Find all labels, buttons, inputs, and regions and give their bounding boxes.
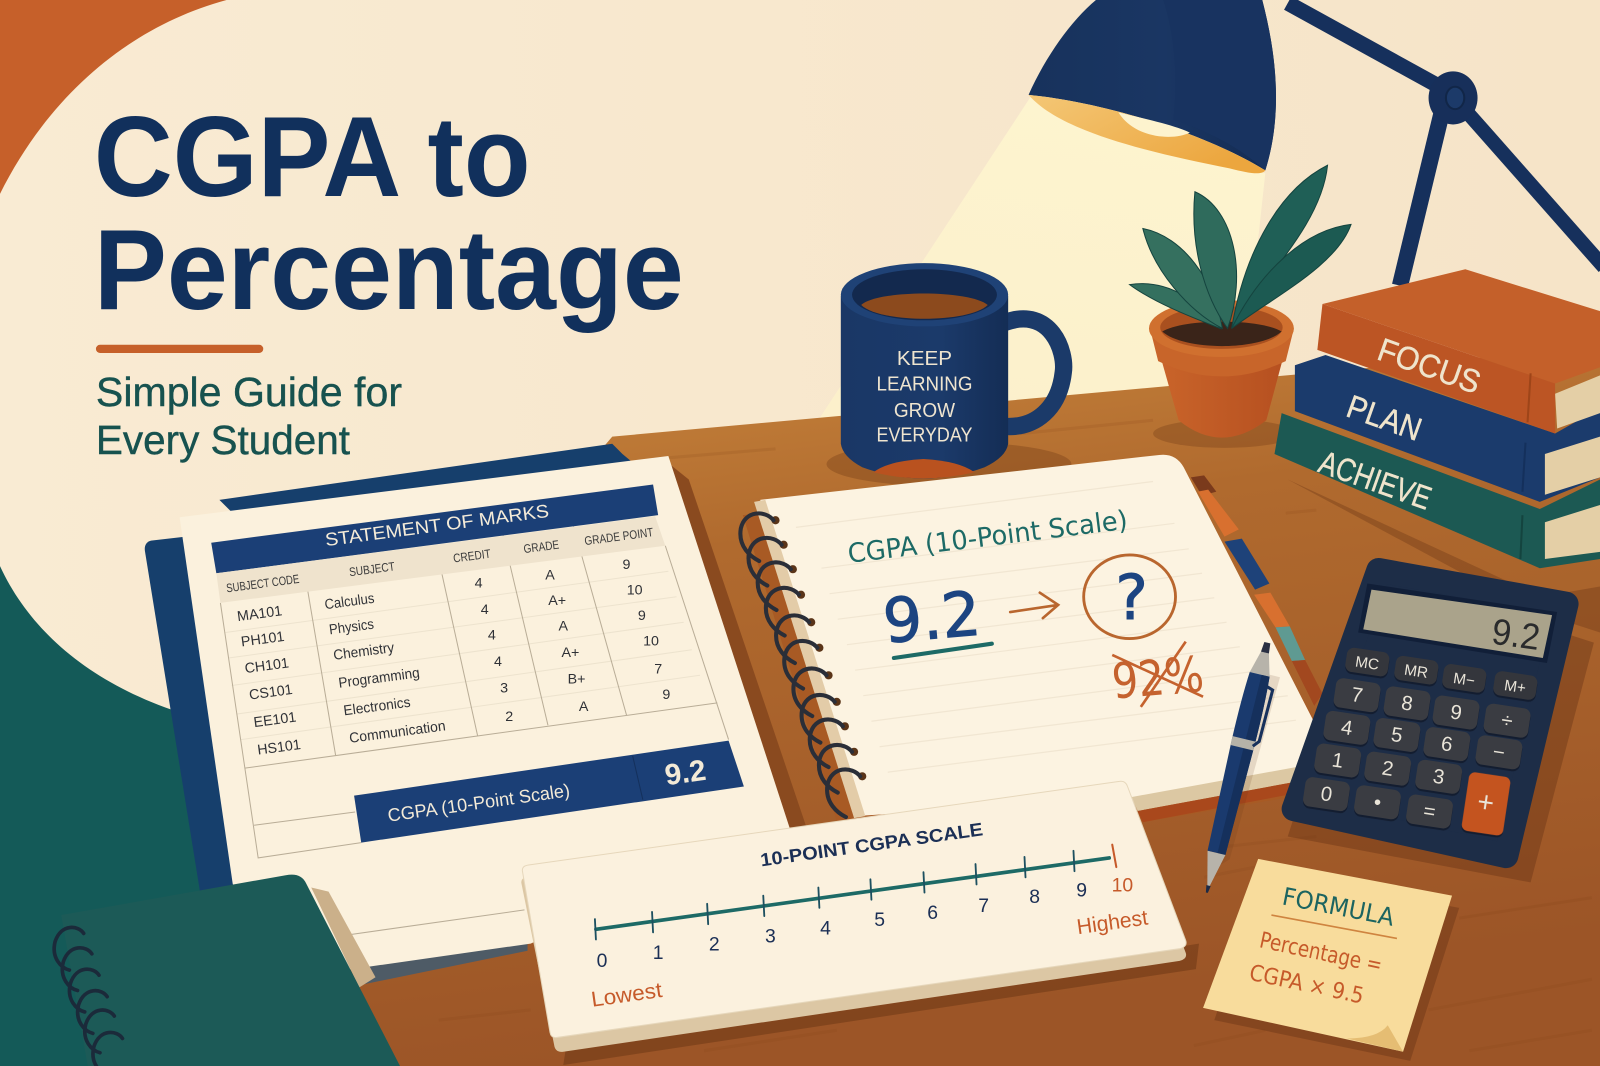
lowest label: Lowest: [590, 978, 664, 1012]
subject names: Programming: [338, 665, 421, 692]
subject codes: EE101: [253, 710, 297, 731]
book: achieve: [1274, 413, 1600, 568]
cgpa result bar: [354, 741, 744, 843]
card title: 10-POINT CGPA SCALE: [759, 818, 984, 870]
plus key: [1461, 772, 1511, 836]
title: [94, 94, 684, 334]
lamp: [1029, 0, 1600, 286]
subject names: Electronics: [343, 695, 411, 719]
grades: A: [579, 699, 589, 715]
mug handle: [1005, 319, 1064, 427]
book: focus: [1317, 269, 1600, 434]
grades: A: [545, 567, 555, 583]
book: plan: [1295, 355, 1600, 502]
subject codes: HS101: [256, 737, 302, 759]
memory keys: M−: [1452, 670, 1476, 690]
subject codes: [236, 603, 302, 759]
scale numbers: 5: [874, 909, 885, 931]
subject names: Communication: [348, 718, 447, 747]
memory keys: M+: [1503, 677, 1527, 697]
subject codes: MA101: [236, 603, 283, 625]
card edge: [521, 793, 1186, 1052]
number keys: 5: [1390, 724, 1404, 747]
subtitle: Simple Guide for: [96, 369, 402, 415]
cgpa result bar: 9.2: [663, 754, 708, 792]
credits: 4: [488, 628, 496, 644]
number line: [595, 845, 1116, 940]
notebook heading: CGPA (10-Point Scale): [846, 505, 1129, 570]
calculator screen: 9.2: [1489, 611, 1543, 658]
number keys: −: [1491, 741, 1506, 765]
stack of books: [1274, 269, 1600, 632]
subtitle: [96, 369, 402, 463]
title divider: [96, 345, 263, 353]
number keys: =: [1422, 800, 1437, 824]
credits: 3: [500, 681, 508, 697]
mug body: [841, 296, 1008, 478]
scale numbers: 8: [1029, 886, 1040, 908]
calculator: [1288, 570, 1594, 882]
column headers: SUBJECT: [348, 559, 396, 579]
number keys: 1: [1330, 749, 1345, 773]
scale numbers: 3: [765, 926, 776, 948]
green notebook rings: [54, 927, 122, 1066]
credits: [475, 576, 513, 725]
sticky note: [1203, 859, 1459, 1061]
card face: [522, 781, 1186, 1038]
number keys: 2: [1380, 758, 1395, 781]
number keys: [1302, 677, 1531, 829]
table header bar: [211, 485, 658, 573]
credits: 4: [494, 654, 502, 670]
number keys: 3: [1431, 766, 1446, 789]
number keys: 6: [1440, 733, 1454, 756]
notebook page: [760, 455, 1318, 816]
number keys: 9: [1449, 701, 1463, 725]
number keys: •: [1372, 792, 1383, 814]
column headers: GRADE: [523, 538, 560, 556]
calculator body: [1294, 570, 1566, 856]
notebook cover: [743, 464, 1322, 822]
column headers: GRADE POINT: [584, 525, 655, 548]
number keys: 4: [1340, 717, 1354, 740]
number keys: ÷: [1500, 710, 1514, 733]
subtitle: Every Student: [96, 417, 351, 463]
scale numbers: [597, 875, 1133, 972]
scale numbers: 6: [927, 902, 938, 924]
mug text: GROW: [894, 400, 956, 422]
handwritten 9.2: 9.2: [880, 579, 983, 658]
grades: A: [559, 618, 569, 634]
coffee mug: [827, 263, 1071, 487]
subject codes: PH101: [240, 629, 285, 650]
cgpa scale card: [521, 781, 1199, 1065]
credits: 2: [505, 709, 513, 725]
leaves: [1130, 165, 1351, 328]
lamp arm: [1288, 3, 1600, 286]
mug text: LEARNING: [877, 374, 972, 396]
grade points: 10: [627, 583, 643, 599]
table title: STATEMENT OF MARKS: [324, 500, 550, 550]
scale numbers: 7: [978, 895, 989, 917]
subject codes: CS101: [248, 682, 294, 704]
lamp light cone: [806, 97, 1265, 439]
mug text: EVERYDAY: [877, 425, 973, 447]
grades: A+: [561, 645, 579, 661]
question circle: ?: [1115, 563, 1148, 634]
statement of marks sheet: [180, 456, 790, 979]
green notebook: [54, 875, 400, 1066]
index tabs: [1191, 475, 1322, 706]
scale numbers: 0: [597, 950, 608, 972]
number keys: 8: [1400, 692, 1414, 716]
sticky note: CGPA × 9.5: [1247, 960, 1366, 1009]
memory keys: [1344, 647, 1538, 701]
crossed out 92%: 92%: [1110, 646, 1206, 711]
credits: 4: [475, 576, 483, 592]
plus key: +: [1475, 786, 1496, 820]
question circle: [1084, 555, 1176, 639]
scale numbers: 4: [820, 917, 831, 939]
ruled lines: [796, 481, 1296, 772]
pot rim: [1150, 328, 1294, 376]
scale numbers: 9: [1076, 880, 1087, 902]
subject names: [324, 591, 447, 747]
subject names: Chemistry: [332, 640, 396, 664]
grades: [545, 567, 589, 715]
grades: A+: [548, 593, 566, 609]
lamp shade: [1029, 0, 1276, 170]
folder behind marks sheet: [145, 444, 806, 984]
memory keys: MC: [1354, 653, 1380, 674]
title: CGPA to: [94, 94, 531, 221]
grade points: 10: [643, 634, 659, 650]
scale numbers: 1: [653, 942, 664, 964]
coffee: [861, 294, 988, 319]
potted plant: [1130, 165, 1351, 448]
number keys: 0: [1319, 783, 1334, 806]
credits: 4: [481, 602, 489, 618]
book: plan: PLAN: [1342, 387, 1427, 448]
pen: [1195, 640, 1287, 897]
table frame: [220, 526, 729, 858]
book: achieve: ACHIEVE: [1314, 443, 1436, 517]
mug text: KEEP: [897, 348, 952, 370]
sticky note: Percentage =: [1257, 927, 1384, 979]
highest label: Highest: [1075, 906, 1149, 939]
number keys: 7: [1350, 684, 1364, 708]
calculator screen: [1358, 583, 1557, 663]
sticky note: FORMULA: [1280, 882, 1397, 932]
grade points: 9: [662, 687, 670, 703]
subject codes: CH101: [244, 655, 290, 677]
cgpa result bar: CGPA (10-Point Scale): [386, 779, 571, 826]
subject names: Calculus: [324, 591, 375, 613]
column headers: SUBJECT CODE: [225, 572, 300, 595]
pot body: [1159, 352, 1285, 438]
desk: [204, 347, 1600, 1066]
lamp opening: [1029, 95, 1265, 173]
memory keys: MR: [1403, 662, 1429, 682]
column headers: [216, 516, 665, 603]
lamp bulb: [1118, 112, 1190, 137]
grade points: 9: [623, 557, 631, 573]
mug text: [877, 348, 973, 447]
grade points: [623, 557, 670, 703]
column headers: CREDIT: [452, 547, 492, 565]
spiral binding: [740, 513, 866, 817]
notebook page stack: [1131, 765, 1298, 811]
title: Percentage: [94, 207, 684, 334]
subject names: Physics: [328, 617, 375, 638]
grades: B+: [568, 671, 585, 687]
grade points: 7: [654, 661, 662, 677]
arrow: [1010, 593, 1058, 618]
scale numbers: 2: [709, 934, 720, 956]
grade points: 9: [638, 608, 646, 624]
spiral notebook: [740, 455, 1322, 822]
scale numbers: 10: [1112, 875, 1133, 897]
book: focus: FOCUS: [1373, 330, 1486, 401]
